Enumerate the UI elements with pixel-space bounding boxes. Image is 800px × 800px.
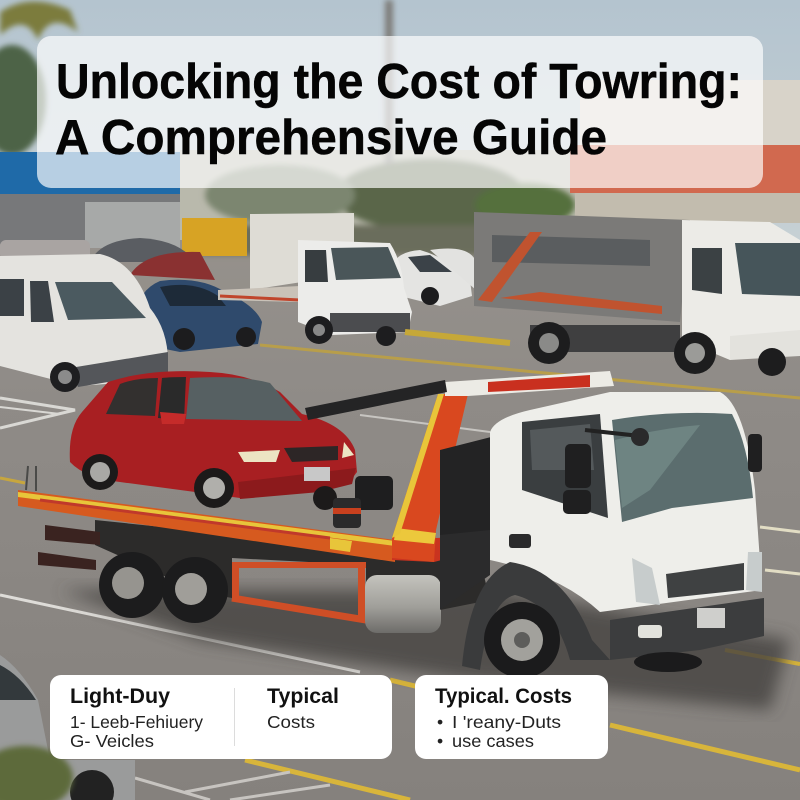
background: white box truck <box>218 213 412 346</box>
red car <box>70 371 357 510</box>
background: grey box truck <box>474 212 800 376</box>
background: white van <box>0 254 168 392</box>
boom and headboard <box>392 394 468 562</box>
title: Unlocking the Cost of Towring: <box>56 55 742 109</box>
illustration: red tow truck load and flatbed <box>18 371 614 633</box>
flatbed <box>18 490 395 562</box>
panel: typical costs list: Typical. Costs <box>435 685 572 708</box>
panel: typical costs list: • <box>437 712 443 732</box>
background: trees and buildings <box>0 0 800 256</box>
panel: typical costs list: use cases <box>452 731 534 751</box>
winch equipment <box>333 436 495 540</box>
text: light-duty: Light-Duy <box>70 685 170 708</box>
title: A Comprehensive Guide <box>55 111 607 165</box>
text: light-duty: 1- Leeb-Fehiuery <box>70 712 203 732</box>
panel: typical costs list: • <box>437 731 443 751</box>
background: road markings <box>0 332 800 800</box>
shadow under tow truck <box>60 590 790 710</box>
panel: typical costs list: I 'reany-Duts <box>452 712 561 732</box>
text: typical costs: Typical <box>267 685 339 708</box>
text: typical costs <box>267 685 339 732</box>
text: typical costs: Costs <box>267 712 315 732</box>
background: foreground car and foliage <box>0 655 135 800</box>
background: parked cars <box>0 238 476 352</box>
title panel <box>37 36 763 188</box>
illustration: white tow truck cab <box>440 392 764 678</box>
chassis and wheels <box>38 525 100 570</box>
text: light-duty: G- Veicles <box>70 731 154 751</box>
panel: typical costs list <box>415 675 608 759</box>
panel: light-duty and typical <box>50 675 392 759</box>
text: light-duty <box>70 685 203 751</box>
chassis underside <box>95 520 490 610</box>
